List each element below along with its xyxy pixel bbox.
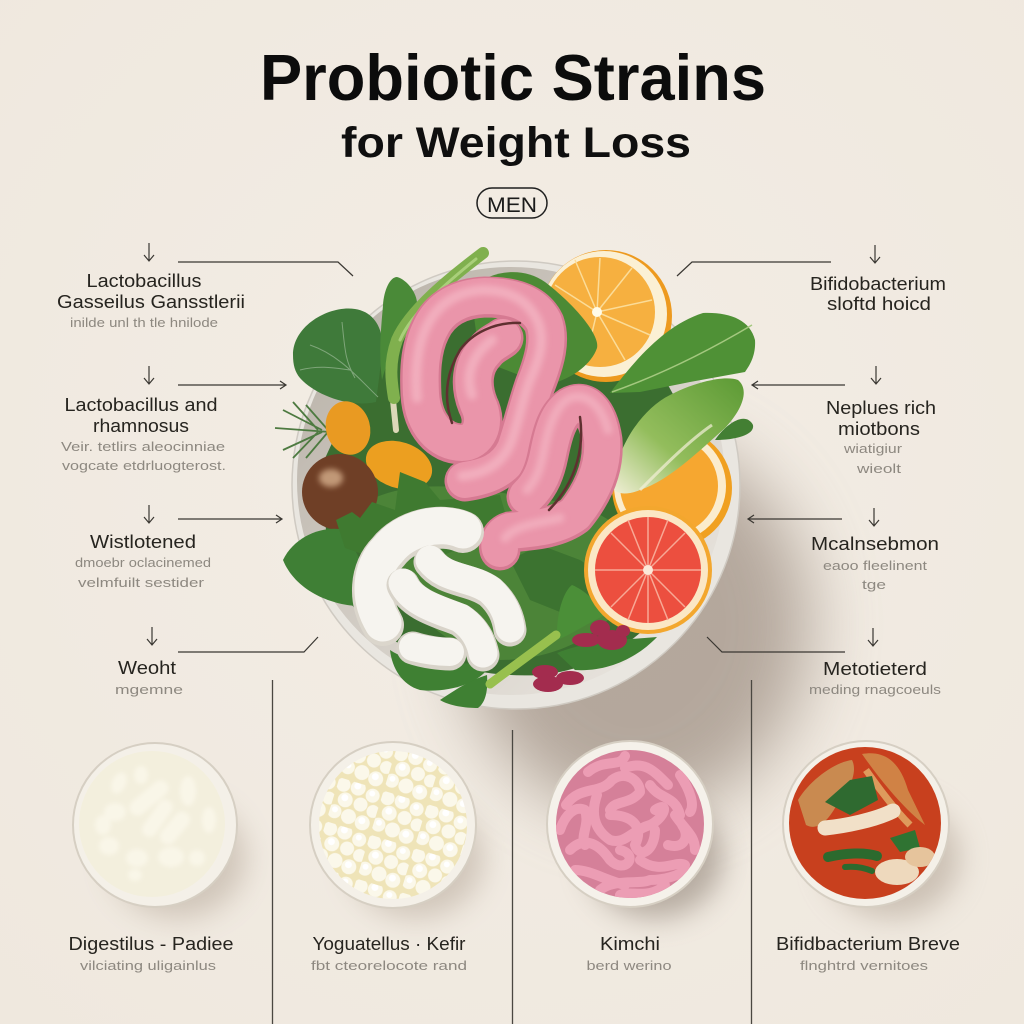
left label 4: mgemne — [115, 682, 183, 697]
caption 2: fbt cteorelocote rand — [311, 958, 467, 973]
grapefruit — [584, 506, 712, 634]
badge: men: MEN — [487, 194, 537, 217]
herbs — [336, 472, 610, 620]
leaf: right big — [610, 313, 755, 393]
left label 3: Wistlotened — [90, 532, 196, 552]
right label 1 — [677, 245, 946, 314]
left label 1: inilde unl th tle hnilode — [70, 315, 218, 330]
left label 3: velmfuilt sestider — [78, 575, 205, 590]
caption 1: vilciating uligainlus — [80, 958, 217, 973]
caption 1 — [68, 934, 234, 973]
title: Probiotic Strains — [260, 41, 766, 114]
right label 3: tge — [862, 577, 886, 592]
left label 3 — [75, 505, 282, 590]
caption 4: Bifidbacterium Breve — [776, 934, 960, 954]
caption 3: Kimchi — [600, 934, 660, 954]
caption 1: Digestilus - Padiee — [68, 934, 234, 954]
food bowl: kimchi stew — [783, 741, 960, 918]
title: for Weight Loss — [341, 119, 691, 167]
caption 2: Yoguatellus · Kefir — [312, 934, 466, 954]
caption 2 — [311, 934, 467, 973]
top orange slice — [540, 250, 672, 382]
right label 3 — [748, 508, 939, 592]
caption 3: berd werino — [586, 958, 672, 973]
right label 4: meding rnagcoeuls — [809, 682, 942, 697]
left label 1 — [57, 243, 353, 330]
white intestine — [373, 526, 510, 655]
greens filling the bowl — [320, 284, 701, 675]
leaf: small right — [715, 419, 753, 440]
right label 3: eaoo fleelinent — [823, 558, 927, 573]
vertical dividers — [272, 680, 752, 1024]
caption 4 — [776, 934, 960, 973]
right label 2 — [752, 366, 936, 476]
food bowl: kefir — [310, 742, 484, 918]
left label 2: Veir. tetlirs aleocinniae — [61, 439, 225, 454]
right label 3: Mcalnsebmon — [811, 534, 939, 554]
right label 2: wiatigiur — [843, 441, 903, 456]
food bowl: yogurt — [73, 743, 246, 918]
left label 2: Lactobacillus and — [64, 395, 218, 415]
caption 3 — [586, 934, 672, 973]
bok choy — [613, 378, 744, 493]
right label 4: Metotieterd — [823, 659, 927, 679]
left label 1: Gasseilus Gansstlerii — [57, 292, 245, 312]
small fruits — [302, 396, 438, 530]
badge: men — [477, 188, 547, 218]
right label 1: Bifidobacterium — [810, 274, 946, 294]
pink intestine — [416, 290, 608, 550]
leaf: top behind intestine — [470, 272, 597, 385]
left label 2: vogcate etdrluogterost. — [62, 458, 226, 473]
leaf: lower left — [283, 529, 365, 606]
caption 4: flnghtrd vernitoes — [800, 958, 929, 973]
central salad bowl — [275, 250, 755, 709]
right orange slice — [612, 428, 732, 548]
leaf: left big — [293, 308, 383, 403]
left label 1: Lactobacillus — [86, 271, 202, 291]
right label 4 — [707, 628, 942, 697]
berries — [532, 620, 630, 692]
title — [260, 41, 766, 167]
leaf: small upper left — [380, 277, 417, 380]
left label 3: dmoebr oclacinemed — [75, 555, 211, 570]
right label 2: miotbons — [838, 419, 920, 439]
leaf: bottom — [390, 585, 657, 708]
herb sprig — [275, 402, 330, 458]
bowl — [292, 261, 740, 709]
left label 2 — [61, 366, 286, 473]
asparagus — [490, 635, 556, 684]
left label 4: Weoht — [118, 658, 176, 678]
right label 2: Neplues rich — [826, 398, 936, 418]
right label 1: sloftd hoicd — [827, 294, 931, 314]
food bowl: kimchi pink — [547, 741, 723, 918]
right label 2: wieolt — [856, 461, 901, 476]
left label 4 — [115, 627, 318, 697]
left label 2: rhamnosus — [93, 416, 189, 436]
stem — [391, 253, 483, 430]
